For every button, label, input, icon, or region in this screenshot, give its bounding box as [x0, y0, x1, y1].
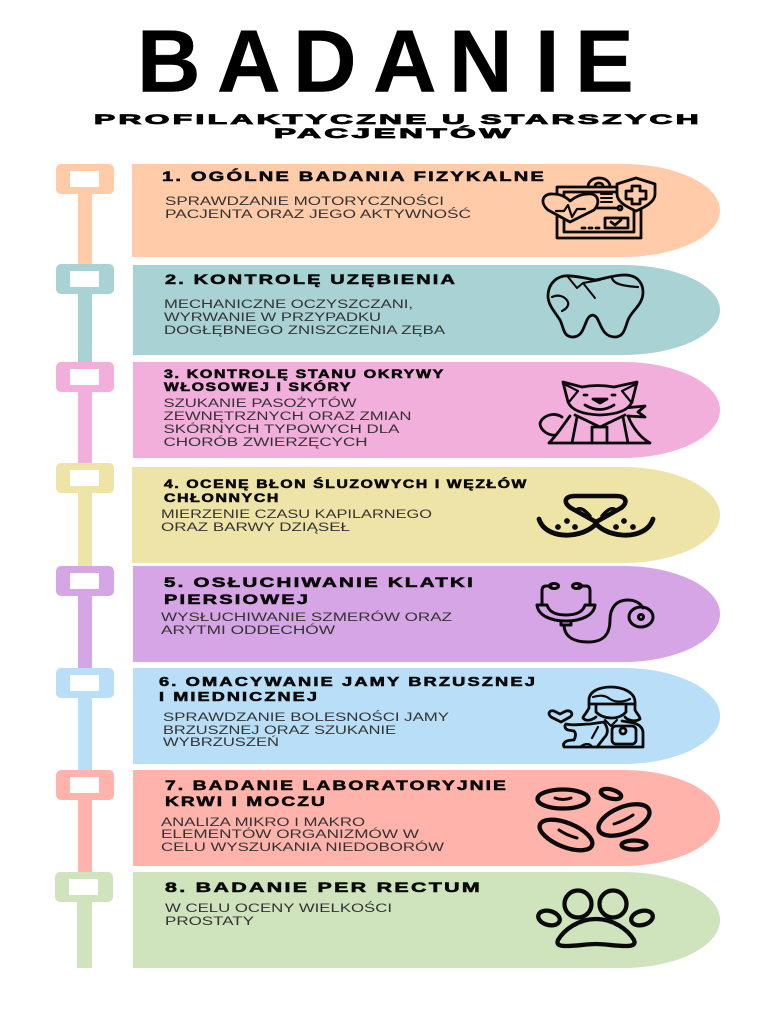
- panel 1 body: PACJENTA ORAZ JEGO AKTYWNOŚĆ: [165, 208, 471, 221]
- panel 4: mucous membranes: [132, 467, 720, 563]
- subtitle: PACJENTÓW: [274, 124, 514, 141]
- panel 3 heading: 3. KONTROLĘ STANU OKRYWY: [164, 369, 445, 381]
- connector 6: [56, 668, 114, 774]
- connector 8: [55, 872, 113, 968]
- connector 7: [56, 770, 114, 876]
- icon: dog nose and muzzle: [539, 496, 653, 535]
- panel 4 body: ORAZ BARWY DZIĄSEŁ: [161, 522, 351, 534]
- panel 4 body: MIERZENIE CZASU KAPILARNEGO: [161, 509, 432, 521]
- panel 7 heading: [165, 777, 508, 809]
- panel 2 background: [133, 265, 720, 355]
- icon: stethoscope: [537, 584, 653, 642]
- panel 5 body: [161, 611, 452, 637]
- icon: blood cells: [536, 787, 654, 857]
- panel 7 heading: KRWI I MOCZU: [165, 793, 327, 809]
- panel 3 body: SZUKANIE PASOŻYTÓW: [164, 397, 357, 410]
- panel 2 body: MECHANICZNE OCZYSZCZANI,: [164, 299, 413, 311]
- panel 7 body: ELEMENTÓW ORGANIZMÓW W: [161, 828, 419, 841]
- panel 2 heading: 2. KONTROLĘ UZĘBIENIA: [165, 271, 457, 287]
- panel 4 heading: [164, 478, 528, 505]
- panel 8 body: W CELU OCENY WIELKOŚCI: [165, 902, 392, 915]
- panel 5 body: WYSŁUCHIWANIE SZMERÓW ORAZ: [161, 611, 452, 624]
- panel 1 body: SPRAWDZANIE MOTORYCZNOŚCI: [165, 195, 444, 208]
- title: BADANIE: [137, 12, 634, 110]
- panel 6 body: WYBRZUSZEŃ: [163, 736, 279, 749]
- panel 5 heading: 5. OSŁUCHIWANIE KLATKI: [164, 574, 475, 590]
- panel 3 background: [133, 362, 720, 458]
- panel 4 background: [132, 467, 720, 563]
- panel 5 heading: PIERSIOWEJ: [164, 591, 310, 607]
- panel 3 body: SKÓRNYCH TYPOWYCH DLA: [164, 423, 400, 436]
- panel 7: blood and urine lab tests: [133, 770, 720, 866]
- panel 6: abdominal palpation: [133, 668, 720, 764]
- panel 1 heading: 1. OGÓLNE BADANIA FIZYKALNE: [162, 167, 546, 184]
- panel 1 background: [132, 164, 720, 257]
- panel 6 heading: I MIEDNICZNEJ: [159, 689, 319, 704]
- icon: veterinarian holding dog: [549, 687, 643, 747]
- panel 3 heading: [164, 369, 445, 394]
- panel 2 body: WYRWANIE W PRZYPADKU: [164, 312, 381, 324]
- connector 4: [56, 463, 114, 569]
- panel 7 body: CELU WYSZUKANIA NIEDOBORÓW: [161, 841, 444, 854]
- panel 8 heading: 8. BADANIE PER RECTUM: [165, 879, 482, 895]
- panel 5: chest auscultation: [133, 566, 720, 662]
- panel 8 background: [133, 872, 720, 968]
- panel 6 background: [133, 668, 720, 764]
- panel 6 heading: [159, 674, 537, 704]
- panel 6 body: SPRAWDZANIE BOLESNOŚCI JAMY: [163, 711, 449, 724]
- panel 8 body: [165, 902, 392, 928]
- panel 6 body: [163, 711, 449, 749]
- panel 7 background: [133, 770, 720, 866]
- icon: medical record with heart and shield: [543, 178, 655, 238]
- panel 2: teeth check: [133, 265, 720, 355]
- panel 6 body: BRZUSZNEJ ORAZ SZUKANIE: [163, 725, 396, 737]
- subtitle: PROFILAKTYCZNE U STARSZYCH: [94, 111, 702, 127]
- panel 6 heading: 6. OMACYWANIE JAMY BRZUSZNEJ: [159, 674, 537, 689]
- connector 2: [56, 264, 114, 366]
- panel 3 body: [164, 397, 412, 449]
- subtitle: [94, 111, 702, 141]
- panel 1 body: [165, 195, 471, 221]
- panel 8 body: PROSTATY: [165, 916, 254, 928]
- icon: paw print: [537, 890, 654, 946]
- panel 3 body: CHORÓB ZWIERZĘCYCH: [164, 436, 368, 449]
- panel 5 body: ARYTMI ODDECHÓW: [161, 624, 335, 637]
- icon: dog with bandana: [540, 382, 650, 443]
- panel 7 body: [161, 817, 444, 854]
- connector 5: [56, 566, 114, 672]
- panel 2 body: DOGŁĘBNEGO ZNISZCZENIA ZĘBA: [164, 325, 445, 337]
- panel 2 body: [164, 299, 445, 337]
- panel 3 body: ZEWNĘTRZNYCH ORAZ ZMIAN: [164, 411, 412, 423]
- panel 1: general physical exam: [132, 164, 720, 257]
- panel 4 body: [161, 509, 432, 534]
- panel 5 background: [133, 566, 720, 662]
- panel 4 heading: CHŁONNYCH: [164, 493, 280, 505]
- icon: damaged tooth: [548, 275, 643, 337]
- panel 5 heading: [164, 574, 475, 607]
- panel 4 heading: 4. OCENĘ BŁON ŚLUZOWYCH I WĘZŁÓW: [164, 478, 528, 491]
- panel 7 body: ANALIZA MIKRO I MAKRO: [161, 817, 365, 829]
- connector 1: [56, 164, 114, 270]
- connector 3: [56, 362, 114, 466]
- panel 7 heading: 7. BADANIE LABORATORYJNIE: [165, 777, 508, 793]
- panel 8: per rectum exam: [133, 872, 720, 968]
- panel 3: skin and coat check: [133, 362, 720, 458]
- panel 3 heading: WŁOSOWEJ I SKÓRY: [164, 381, 352, 394]
